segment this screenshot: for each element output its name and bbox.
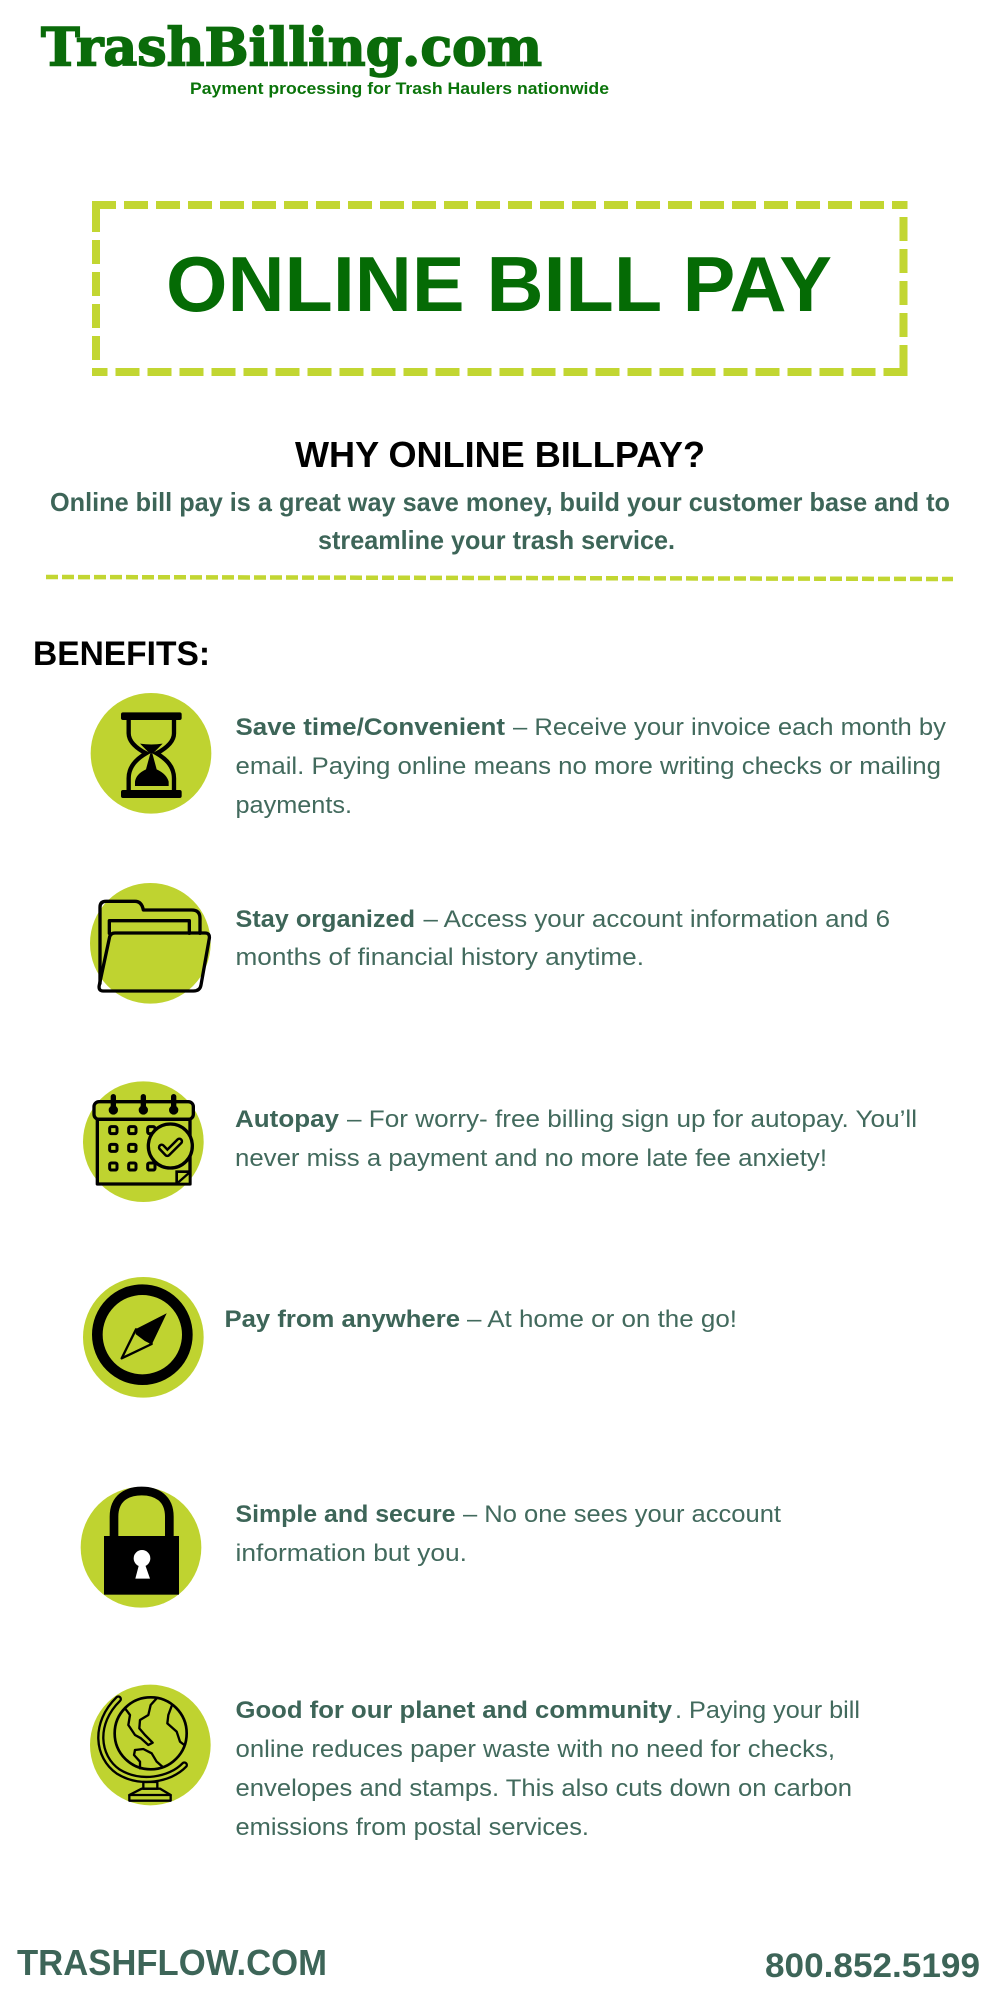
intro text [50, 487, 950, 555]
heading: why online billpay: WHY ONLINE BILLPAY? [295, 434, 705, 475]
benefit text: pay from anywhere [224, 1306, 737, 1333]
benefit: good for our planet [90, 1685, 860, 1841]
footer: website: TRASHFLOW.COM [17, 1942, 327, 1983]
benefit text: autopay: Autopay [235, 1106, 339, 1133]
logo: TrashBilling.com: Payment processing for Trash Haulers nationwide [190, 80, 609, 98]
benefit text: autopay: – For worry- free billing sign up for autopay. You’ll [347, 1106, 917, 1133]
benefit text: save time: email. Paying online means no more writing checks or mailing [236, 753, 941, 780]
benefit text: good for our planet: emissions from postal services. [236, 1814, 589, 1841]
icon: compass [83, 1277, 204, 1398]
icon: padlock [81, 1487, 201, 1608]
intro text: Online bill pay is a great way save money, build your customer base and to [50, 487, 950, 517]
benefit text: good for our planet [236, 1697, 860, 1841]
benefit text: pay from anywhere: Pay from anywhere [224, 1306, 460, 1333]
benefit text: stay organized [236, 906, 890, 971]
benefit text: simple and secure [236, 1501, 781, 1567]
icon: calendar [83, 1081, 204, 1202]
benefit text: good for our planet: Good for our planet and community [236, 1697, 672, 1724]
benefit text: save time [236, 714, 946, 819]
benefit text: stay organized: months of financial history anytime. [236, 944, 644, 971]
benefit text: save time: payments. [236, 792, 352, 819]
heading: benefits: BENEFITS: [33, 635, 210, 673]
benefit text: autopay: never miss a payment and no more late fee anxiety! [235, 1145, 827, 1172]
benefit text: pay from anywhere: – At home or on the go! [467, 1306, 737, 1333]
icon: folder [90, 883, 211, 1004]
benefit text: simple and secure: Simple and secure [236, 1501, 456, 1528]
benefit text: autopay [235, 1106, 917, 1172]
benefit text: good for our planet: envelopes and stamps. This also cuts down on carbon [236, 1775, 852, 1802]
benefit text: good for our planet: online reduces paper waste with no need for checks, [236, 1736, 835, 1763]
benefit: stay organized [90, 883, 890, 1004]
benefit: pay from anywhere [83, 1277, 737, 1398]
icon: hourglass [91, 693, 211, 814]
footer: phone number: 800.852.5199 [765, 1947, 980, 1985]
benefit text: save time: – Receive your invoice each month by [513, 714, 946, 741]
icon: globe [90, 1685, 211, 1805]
benefit text: simple and secure: information but you. [236, 1540, 467, 1567]
intro text: streamline your trash service. [318, 525, 675, 555]
benefit text: good for our planet: . Paying your bill [675, 1697, 860, 1724]
benefit text: stay organized: Stay organized [236, 906, 415, 933]
benefit text: simple and secure: – No one sees your account [463, 1501, 781, 1528]
benefit: autopay [83, 1081, 917, 1202]
benefit: save time [91, 693, 946, 819]
benefit: simple and secure [81, 1487, 781, 1608]
logo: TrashBilling.com: TrashBilling.com [41, 18, 542, 78]
benefit text: stay organized: – Access your account information and 6 [424, 906, 890, 933]
title box: ONLINE BILL PAY: ONLINE BILL PAY [166, 240, 832, 328]
logo: TrashBilling.com [41, 18, 609, 98]
benefit text: save time: Save time/Convenient [236, 714, 505, 741]
